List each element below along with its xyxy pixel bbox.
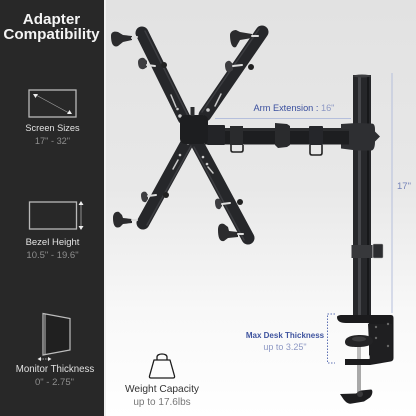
text: weight capacity: Weight Capacity xyxy=(125,384,200,395)
text: monitor thickness: 0" - 2.75" xyxy=(35,377,74,388)
icon: screen size xyxy=(29,90,76,117)
text: monitor thickness xyxy=(16,364,94,388)
desk clamp xyxy=(337,315,394,404)
adapter plate X xyxy=(111,29,262,241)
arm: upper right xyxy=(201,29,262,119)
text: desk thickness: Max Desk Thickness xyxy=(246,331,325,340)
icon: monitor thickness xyxy=(38,314,70,361)
text: screen sizes: Screen Sizes xyxy=(25,123,80,133)
icon: weight bag xyxy=(149,354,175,378)
text: bezel height: 10.5" - 19.6" xyxy=(26,250,79,261)
text: arm extension: Arm Extension : 16" xyxy=(254,103,334,113)
text: bezel height: Bezel Height xyxy=(26,237,80,248)
knobs xyxy=(111,30,258,241)
arm: lower left xyxy=(143,142,191,225)
text: desk thickness xyxy=(246,331,325,352)
center hub xyxy=(180,107,208,144)
dimension line: height xyxy=(391,73,393,313)
dimension line: arm extension xyxy=(215,118,351,120)
monitor pole xyxy=(352,74,383,318)
arm: lower right xyxy=(194,145,248,240)
text: height: 17" xyxy=(397,181,411,192)
title: Compatibility xyxy=(3,26,100,43)
text: weight capacity: up to 17.6lbs xyxy=(133,397,191,408)
icon: bezel height xyxy=(30,201,84,230)
panel: dark sidebar xyxy=(0,0,106,416)
text: screen sizes xyxy=(25,123,80,146)
text: weight capacity xyxy=(125,384,200,408)
title xyxy=(3,11,100,43)
text: monitor thickness: Monitor Thickness xyxy=(16,364,94,375)
text: bezel height xyxy=(26,237,80,261)
bracket: desk thickness xyxy=(328,314,335,363)
text: desk thickness: up to 3.25" xyxy=(263,342,307,352)
extension arm xyxy=(205,123,380,155)
arm: upper left xyxy=(142,31,188,118)
text: screen sizes: 17" - 32" xyxy=(35,136,70,146)
title: Adapter xyxy=(23,11,80,28)
